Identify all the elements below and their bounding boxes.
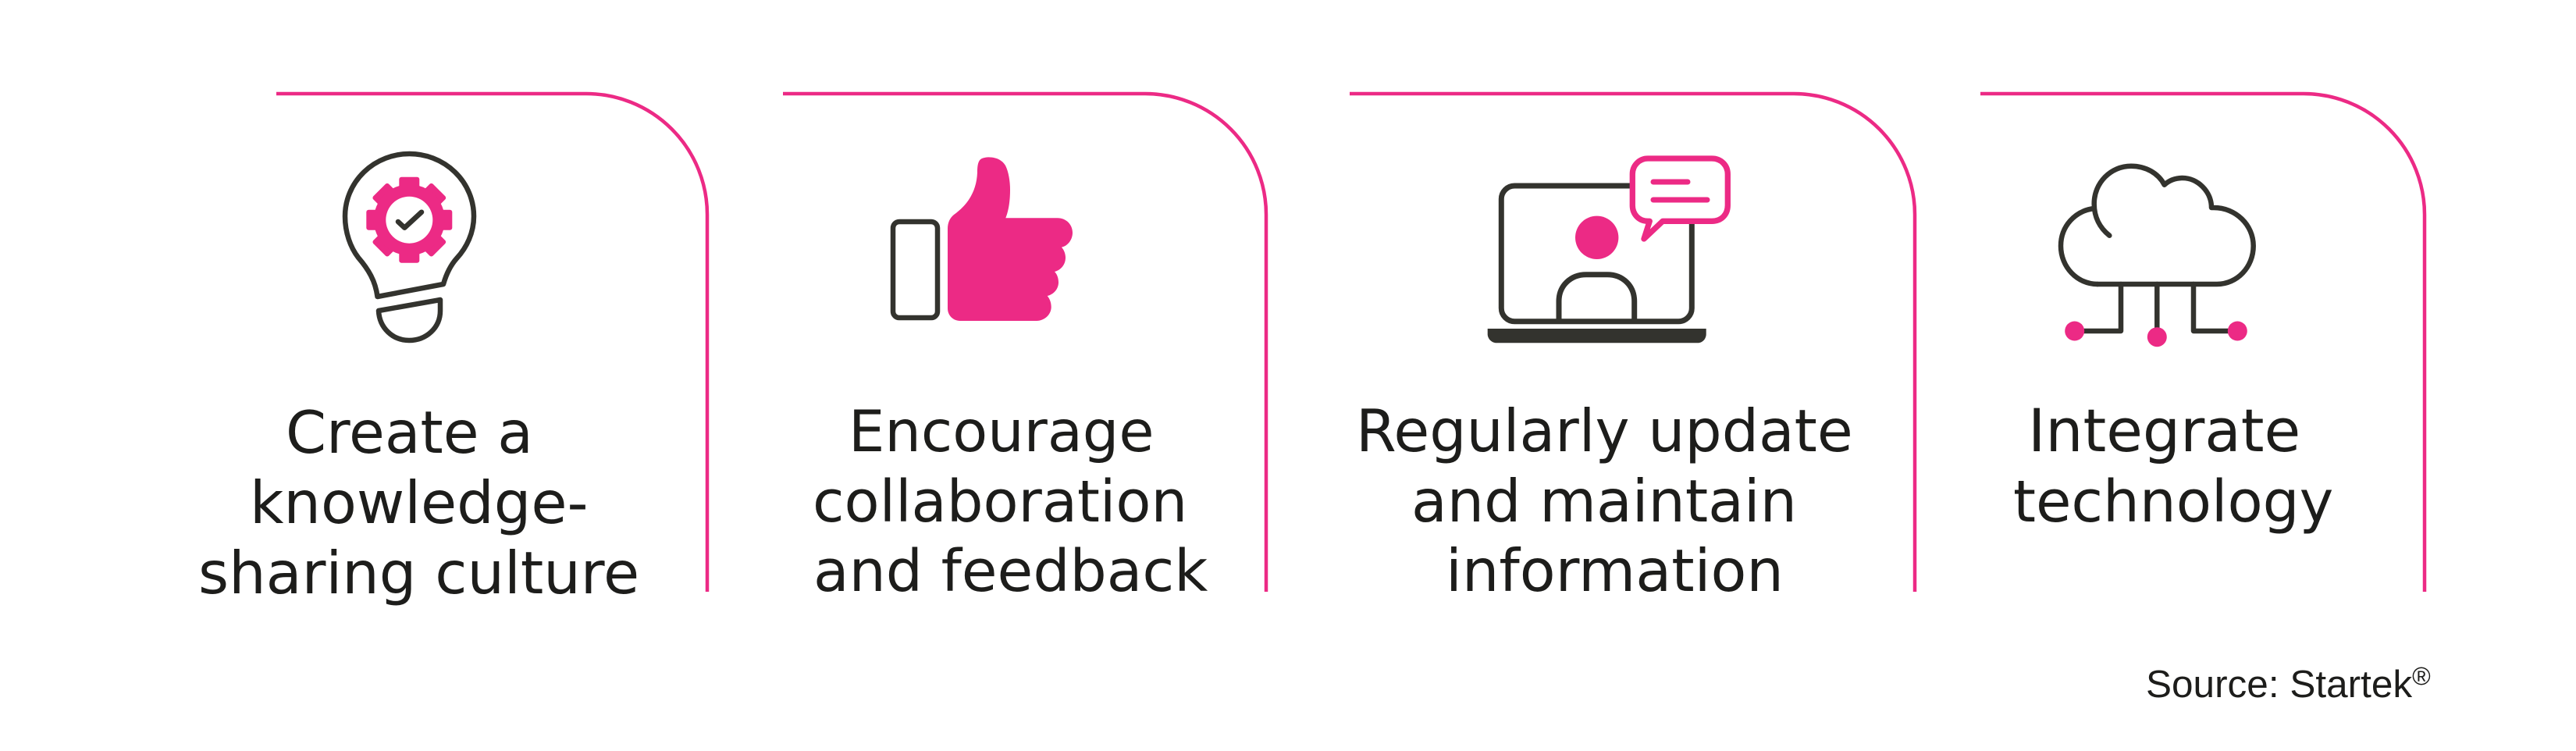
heading: Create a: [286, 399, 533, 467]
source note: Source: Startek: [2146, 663, 2412, 706]
panel border: [276, 94, 707, 592]
source note: ®: [2412, 662, 2431, 690]
panel: integrate technology: [1980, 94, 2425, 592]
panel border: [1980, 94, 2425, 592]
heading: Integrate: [2028, 397, 2300, 465]
icon: thumbs up: [893, 157, 1073, 321]
panel border: [1350, 94, 1915, 592]
panel: regularly update and maintain information: [1350, 94, 1915, 605]
panel border: [783, 94, 1266, 592]
heading: Encourage: [849, 399, 1155, 465]
icon: laptop with person and speech bubble: [1488, 158, 1727, 343]
heading: knowledge-: [250, 468, 589, 537]
heading: sharing culture: [198, 539, 639, 607]
heading: collaboration: [813, 469, 1187, 536]
icon: light bulb with gear: [345, 154, 474, 340]
panel: encourage collaboration and feedback: [783, 94, 1266, 605]
heading: and maintain: [1411, 468, 1797, 536]
heading: technology: [2013, 468, 2333, 536]
heading: and feedback: [813, 537, 1208, 605]
heading: Regularly update: [1356, 397, 1853, 465]
panel: create a knowledge-sharing culture: [198, 94, 707, 607]
heading: information: [1446, 536, 1784, 605]
icon: cloud network: [2061, 166, 2254, 347]
